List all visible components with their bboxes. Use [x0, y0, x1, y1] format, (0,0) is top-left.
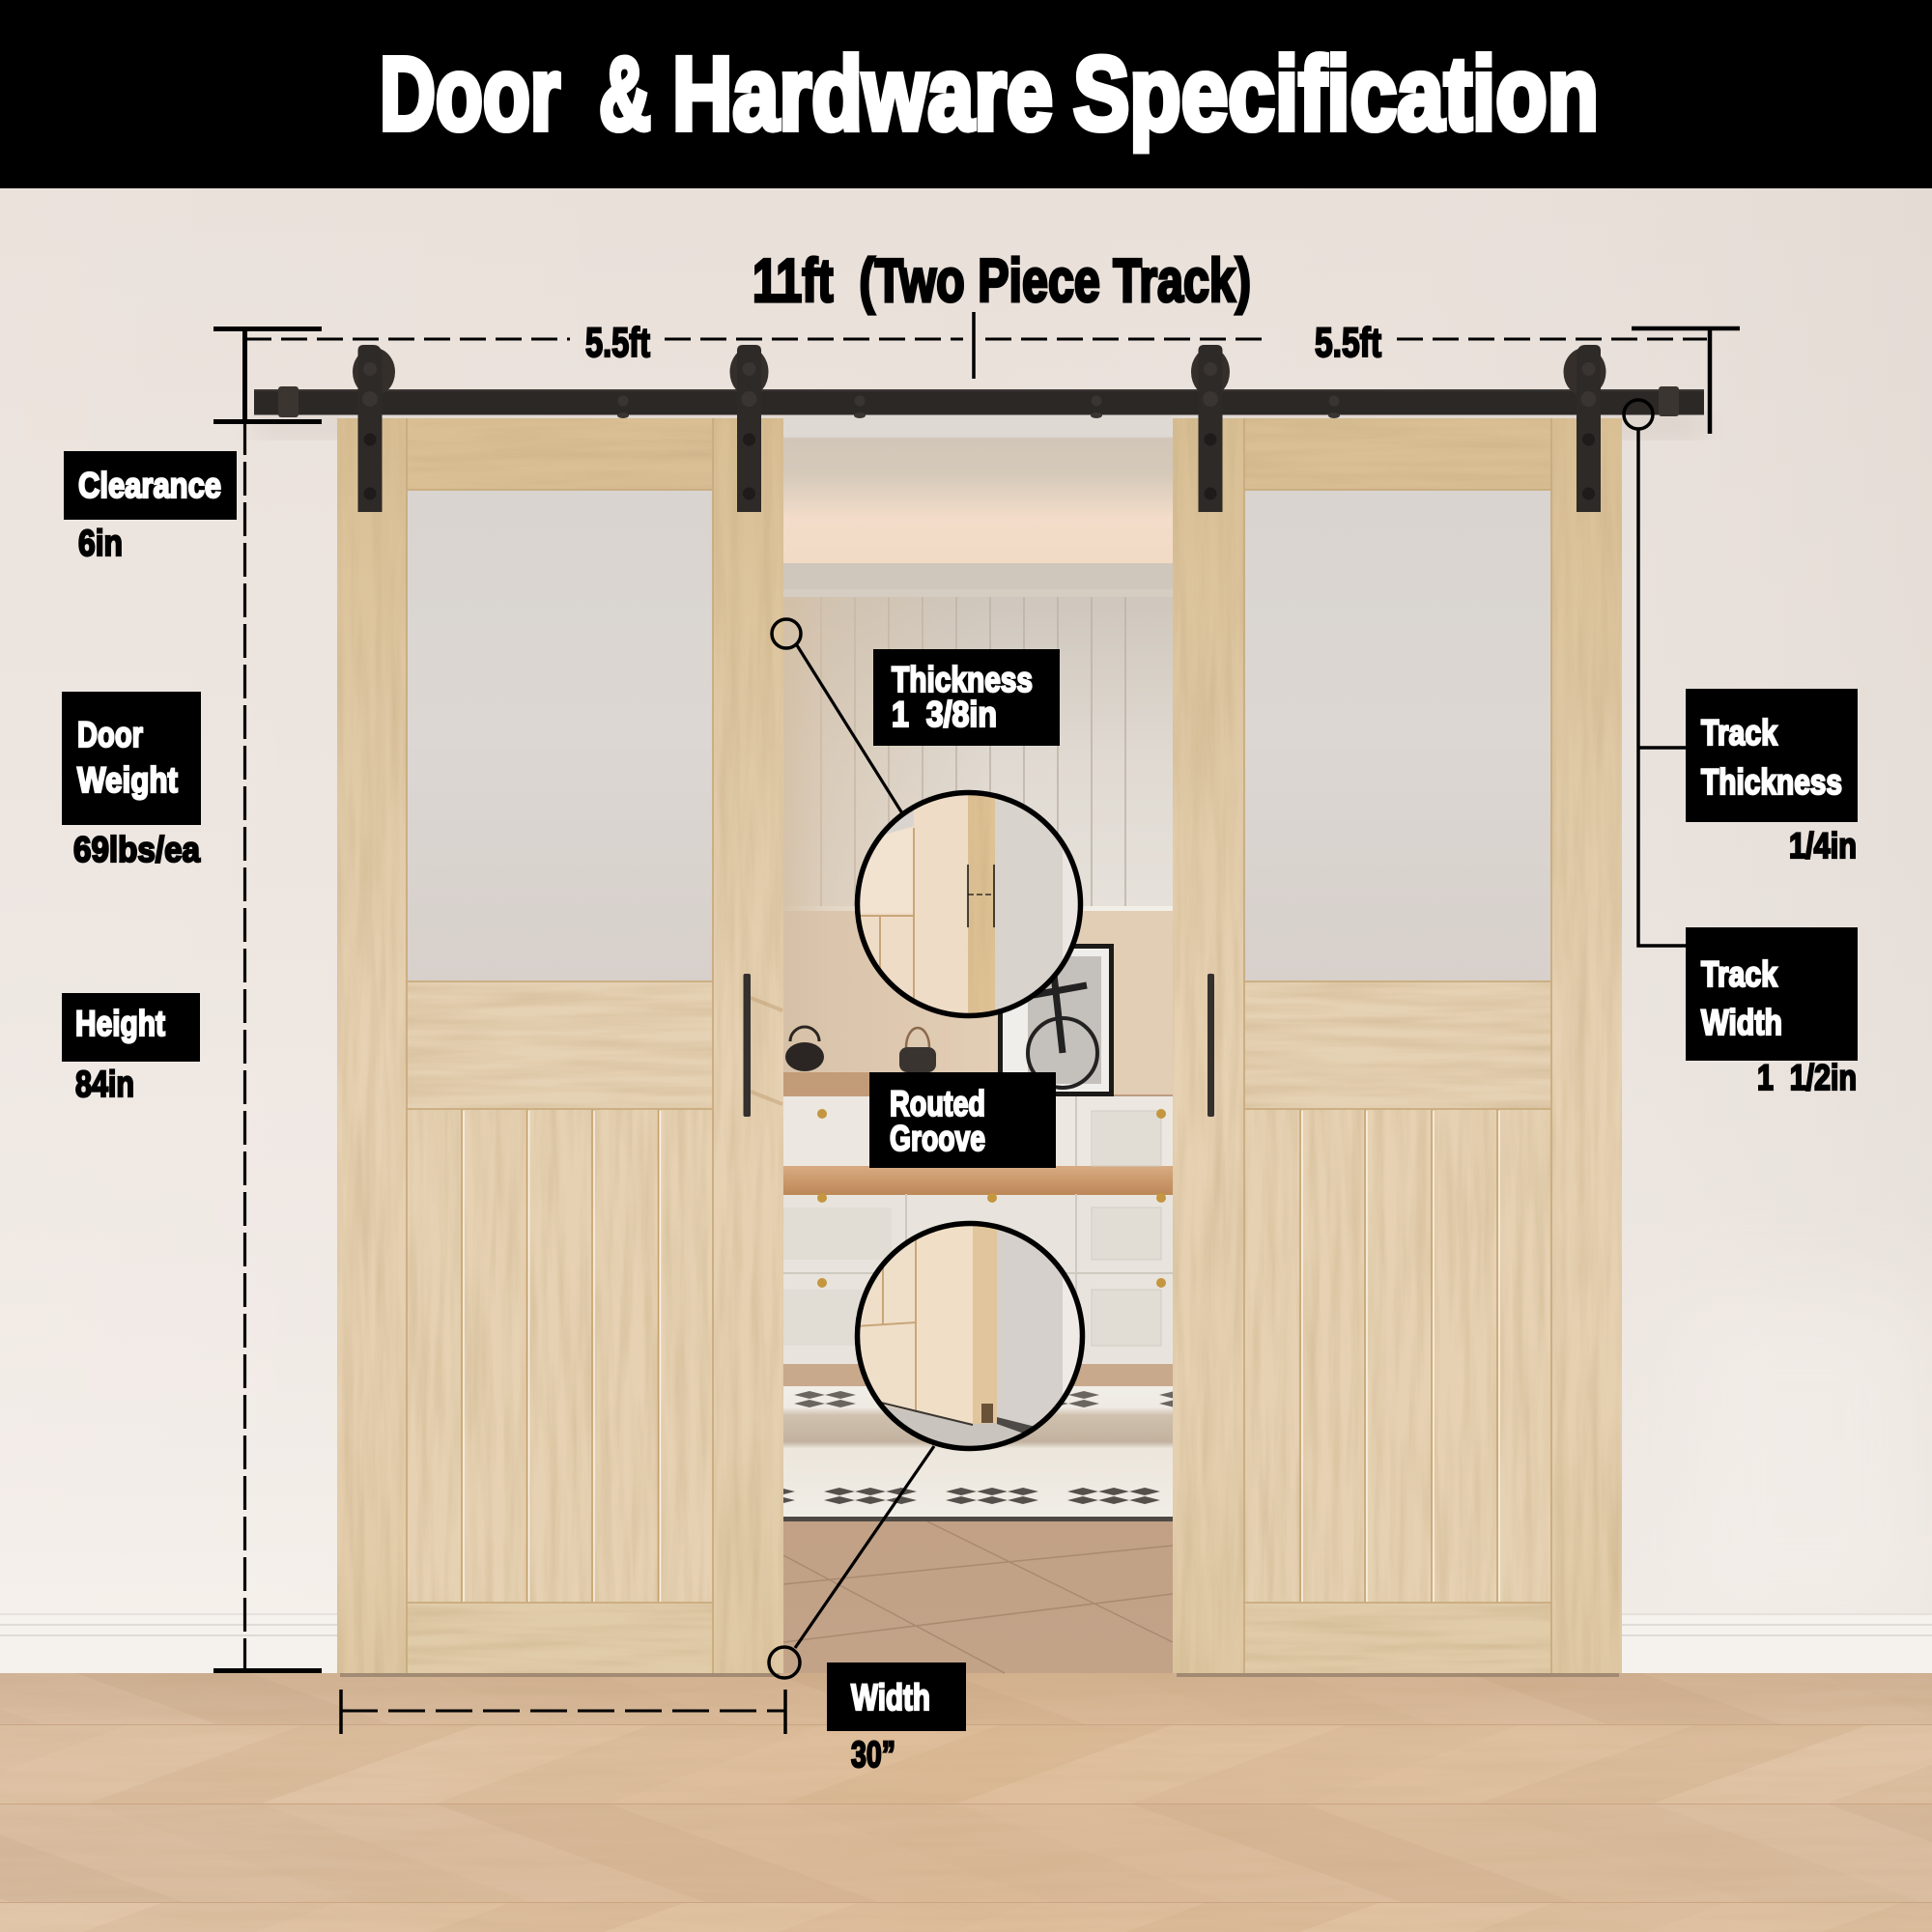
routed groove marker and leader: [769, 1446, 934, 1678]
doorway view into kitchen: [783, 414, 1173, 1673]
framed bicycle picture: [998, 944, 1114, 1096]
plank panel: [1244, 1109, 1551, 1603]
callout: thickness: [873, 649, 1060, 746]
callout: track thickness: 1/4in: [1789, 826, 1857, 866]
cabinets and counter: [783, 1096, 1173, 1364]
beadboard grooves: [821, 597, 1125, 910]
width dimension line: [341, 1690, 785, 1734]
title: Hardware: [672, 35, 1053, 152]
label: left 5.5ft: 5.5ft: [585, 320, 650, 366]
middle rail: [1244, 981, 1551, 1109]
sliding track: [254, 386, 1704, 418]
callout: thickness: Thickness: [892, 660, 1033, 699]
door handle: right: [1208, 974, 1214, 1117]
callout: routed groove: Routed: [890, 1084, 985, 1123]
callout: width: 30”: [851, 1735, 895, 1776]
track leader lines: [1624, 400, 1686, 946]
hanger strap 2: [730, 345, 769, 512]
callout: width: [827, 1662, 966, 1776]
callout: height: 84in: [75, 1065, 134, 1105]
title: &: [599, 35, 651, 152]
header band: [0, 0, 1932, 188]
callout: routed groove: Groove: [890, 1119, 985, 1158]
callout: track thickness: [1686, 689, 1858, 866]
title: [380, 35, 1599, 152]
callout: height: Height: [75, 1004, 165, 1043]
hanger strap 3: [1191, 345, 1230, 512]
baseboard: [0, 1613, 1932, 1673]
glass panel: [407, 490, 713, 981]
callout: width: Width: [851, 1678, 930, 1719]
callout: track thickness: Thickness: [1701, 762, 1842, 802]
door handle: left: [744, 974, 782, 1117]
magnifier: routed groove: [850, 1217, 1092, 1459]
hanger strap 4: [1563, 345, 1605, 512]
callout: thickness: 1 3/8in: [892, 695, 997, 734]
callout: track width: Width: [1701, 1003, 1782, 1042]
callout: routed groove: [869, 1072, 1056, 1168]
door body and stiles: [337, 418, 783, 1673]
hanger strap 1: [353, 345, 395, 512]
callout: height: [62, 993, 200, 1105]
callout: door weight: 69lbs/ea: [73, 830, 200, 869]
wall background: [0, 188, 1932, 1673]
label: right 5.5ft: 5.5ft: [1315, 320, 1381, 366]
title: Door: [380, 35, 560, 152]
bottom rail: [407, 1603, 713, 1673]
glass panel: [1244, 490, 1551, 981]
middle rail: [407, 981, 713, 1109]
door body and stiles: [1173, 418, 1622, 1673]
track dimension lines: [245, 312, 1740, 434]
magnifier: door thickness: [854, 790, 1084, 1018]
thickness marker and leader: [772, 619, 902, 813]
top rail: [1244, 418, 1551, 490]
top rail: [407, 418, 713, 490]
plank panel: [407, 1109, 713, 1603]
callout: door weight: Door: [77, 715, 143, 754]
callout: track thickness: Track: [1701, 713, 1777, 753]
herringbone floor: [0, 1673, 1932, 1932]
callout: track width: Track: [1701, 954, 1777, 994]
callout: clearance: [64, 451, 237, 564]
track length heading: 11ft (Two Piece Track): [753, 247, 1251, 315]
right door: [1173, 418, 1622, 1677]
callout: clearance: 6in: [78, 524, 123, 564]
callout: door weight: [62, 692, 201, 869]
teapot and kettle: [785, 1027, 936, 1072]
title: Specification: [1073, 35, 1599, 152]
clearance and height dimension lines: [213, 328, 322, 1671]
callout: clearance: Clearance: [78, 466, 221, 505]
callout: track width: 1 1/2in: [1757, 1058, 1857, 1097]
bottom rail: [1244, 1603, 1551, 1673]
left door: [337, 418, 783, 1677]
callout: track width: [1686, 927, 1858, 1097]
patterned rug: [783, 1386, 1173, 1521]
callout: door weight: Weight: [77, 760, 178, 800]
